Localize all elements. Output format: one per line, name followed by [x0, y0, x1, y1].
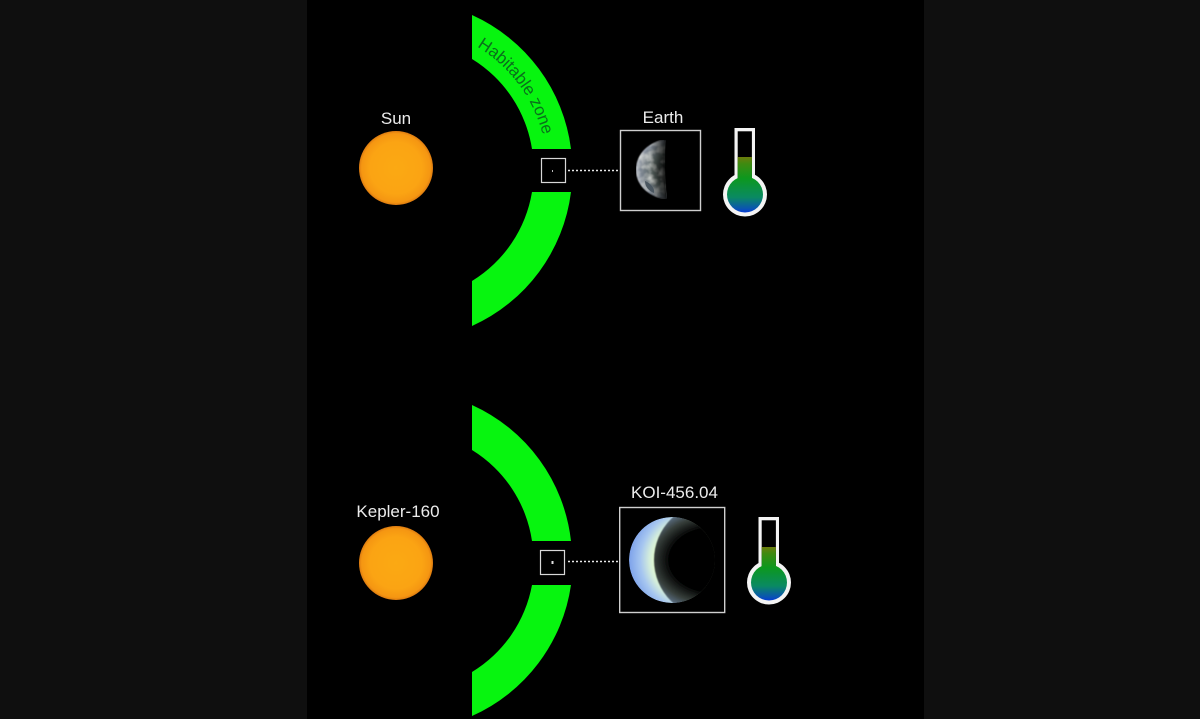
- label: Earth: Earth: [643, 108, 683, 127]
- KOI-456.04 image box: [619, 506, 726, 614]
- dotted connector: [568, 170, 619, 172]
- label: Kepler-160: Kepler-160: [356, 502, 440, 521]
- label: Sun: Sun: [381, 109, 411, 128]
- habitable zone lower arc: [472, 585, 571, 716]
- habitable zone upper arc: [472, 405, 571, 541]
- inset marker box with Earth: [542, 158, 566, 182]
- icon: Sun: [359, 131, 433, 205]
- icon: thermometer KOI-456.04: [747, 517, 791, 604]
- panel: Kepler-160 system: [356, 405, 791, 716]
- inset marker box with KOI-456.04: [540, 550, 564, 574]
- panel: solar system: [359, 15, 767, 326]
- habitable zone upper arc: [472, 15, 571, 149]
- habitable zone lower arc: [472, 192, 571, 326]
- label: KOI-456.04: KOI-456.04: [631, 483, 718, 502]
- panel: black central background: [307, 0, 924, 719]
- icon: Kepler-160 star: [359, 526, 433, 600]
- icon: thermometer Earth: [723, 128, 767, 216]
- Earth image box: [620, 130, 700, 210]
- dotted connector: [568, 560, 619, 562]
- label: Habitable zone: Habitable zone: [478, 38, 550, 134]
